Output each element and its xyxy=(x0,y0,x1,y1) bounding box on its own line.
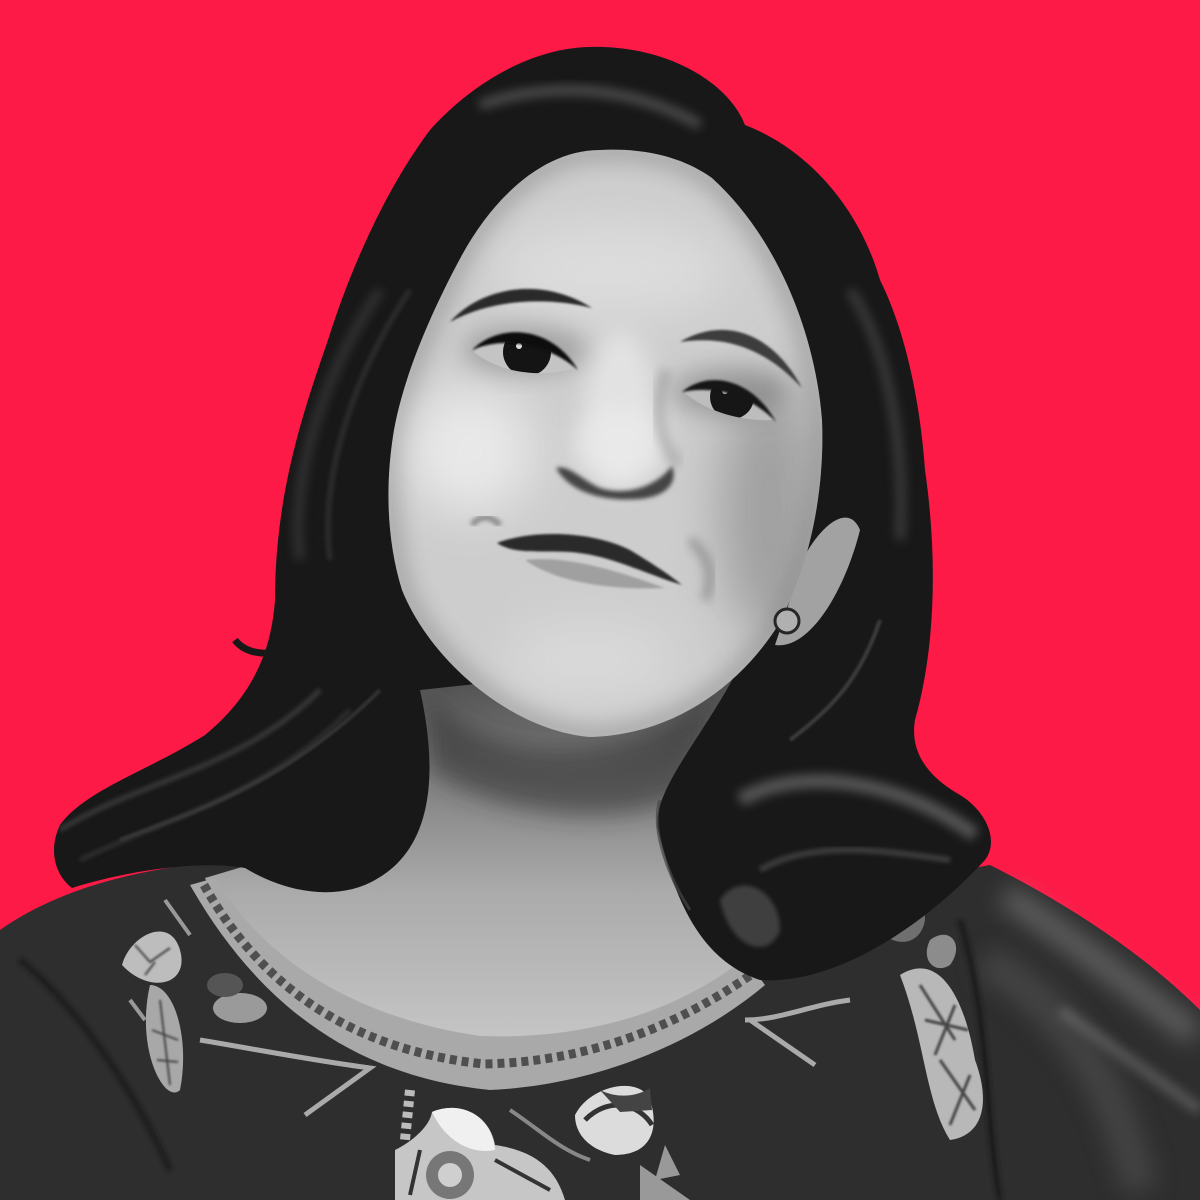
hair xyxy=(54,47,991,980)
floral print: right xyxy=(745,893,983,1140)
right eyebrow xyxy=(680,330,802,388)
neck and chest xyxy=(205,640,780,1062)
floral print: left xyxy=(122,900,370,1115)
right eye xyxy=(682,375,776,422)
collar trim xyxy=(190,878,765,1090)
left eyebrow xyxy=(450,289,592,322)
neck shadow xyxy=(425,680,725,815)
mouth xyxy=(497,534,682,588)
left eye xyxy=(472,328,578,376)
face xyxy=(388,150,822,737)
floral print: bottom centre xyxy=(395,1086,690,1200)
blouse xyxy=(0,860,1200,1200)
earring xyxy=(775,609,799,633)
ear xyxy=(775,518,860,645)
nose xyxy=(556,370,678,500)
